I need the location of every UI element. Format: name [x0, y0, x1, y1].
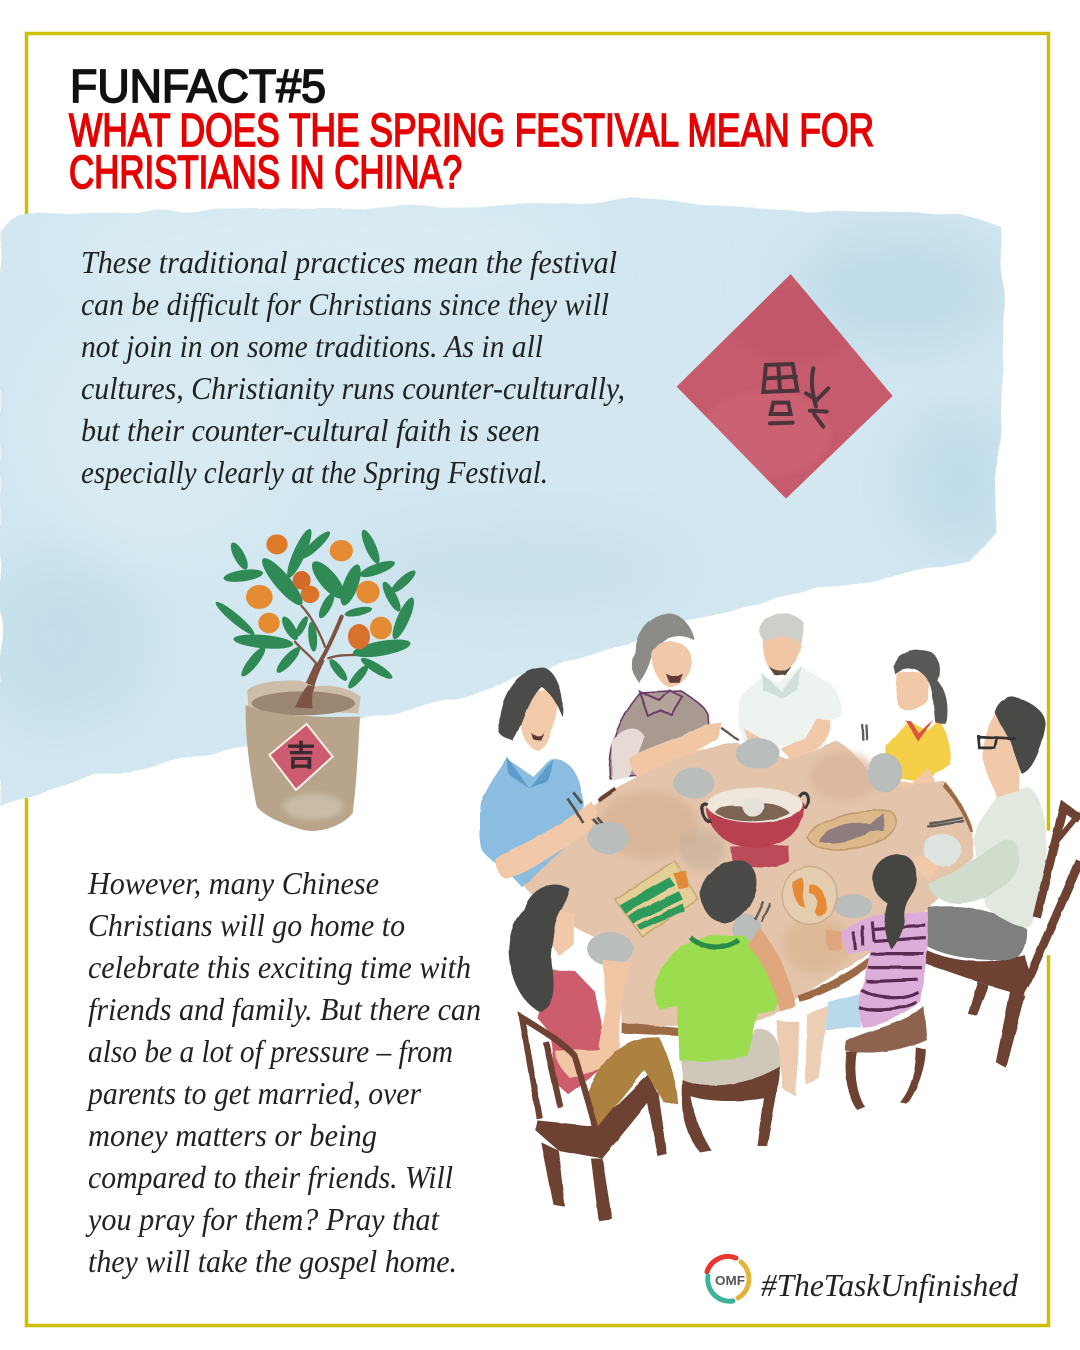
text block: festival difficulty: can be difficult for Christians since they will: [81, 286, 609, 322]
text block: festival difficulty: but their counter-cultural faith is seen: [81, 412, 540, 448]
fish plate: [807, 810, 896, 850]
footer: OMF logo: OMF: [715, 1273, 745, 1288]
chair left back: [522, 1018, 595, 1126]
chair right: [926, 807, 1080, 1068]
text block: pressure and prayer: Christians will go home to: [88, 907, 405, 943]
icon: red fu diamond: [677, 274, 893, 499]
greens plate: [615, 861, 698, 937]
person: woman in blue: [480, 668, 616, 887]
text block: pressure and prayer: However, many Chinese: [87, 865, 379, 901]
footer: OMF logo: [707, 1257, 749, 1301]
chair left seat and legs: [535, 1074, 667, 1221]
text block: pressure and prayer: celebrate this exciting time with: [88, 949, 471, 985]
hot pot: [702, 787, 808, 868]
text block: festival difficulty: cultures, Christianity runs counter-culturally,: [81, 370, 625, 406]
text block: pressure and prayer: [85, 865, 481, 1279]
person: child in green: [655, 861, 800, 1152]
person: woman in red: [509, 884, 678, 1126]
tree branches: [295, 606, 357, 707]
text block: festival difficulty: These traditional practices mean the festival: [81, 244, 617, 280]
watercolor blue wash panel: [0, 200, 1020, 806]
heading: question: [69, 104, 874, 198]
border knockout behind chair: [1042, 831, 1054, 956]
pot red tag: 吉: [286, 740, 316, 773]
bowls and chopsticks: [587, 725, 964, 966]
person: girl in yellow: [886, 650, 951, 797]
text block: festival difficulty: not join in on some traditions. As in all: [81, 328, 543, 364]
person: girl in stripes: [826, 854, 928, 1109]
text block: festival difficulty: [81, 244, 625, 490]
text block: pressure and prayer: money matters or being: [88, 1117, 377, 1153]
prawns plate: [782, 866, 837, 924]
table legs: [777, 1006, 828, 1096]
illustration: family reunion dinner: [480, 614, 1080, 1221]
text block: pressure and prayer: they will take the gospel home.: [88, 1243, 457, 1279]
illustration: kumquat tree in pot: [213, 527, 418, 831]
tree leaves: [213, 527, 418, 691]
pot red tag: [269, 724, 333, 790]
footer: hashtag: #TheTaskUnfinished: [761, 1267, 1019, 1303]
text block: pressure and prayer: compared to their friends. Will: [88, 1159, 453, 1195]
person: grandfather: [738, 614, 842, 759]
text block: pressure and prayer: friends and family. But there can: [88, 991, 481, 1027]
person: grandmother: [610, 614, 722, 783]
pot: [246, 681, 361, 831]
heading: question: CHRISTIANS IN CHINA?: [69, 146, 462, 198]
person: man with glasses: [912, 696, 1047, 960]
title: fun fact number: FUNFACT#5: [70, 60, 326, 112]
text block: festival difficulty: especially clearly at the Spring Festival.: [81, 454, 548, 490]
text block: pressure and prayer: also be a lot of pressure – from: [88, 1033, 453, 1069]
table top: [522, 741, 974, 1036]
table base blue patch: [825, 994, 861, 1030]
kumquat fruits: [246, 534, 392, 649]
text block: pressure and prayer: parents to get married, over: [86, 1075, 422, 1111]
text block: pressure and prayer: you pray for them? Pray that: [85, 1201, 440, 1237]
